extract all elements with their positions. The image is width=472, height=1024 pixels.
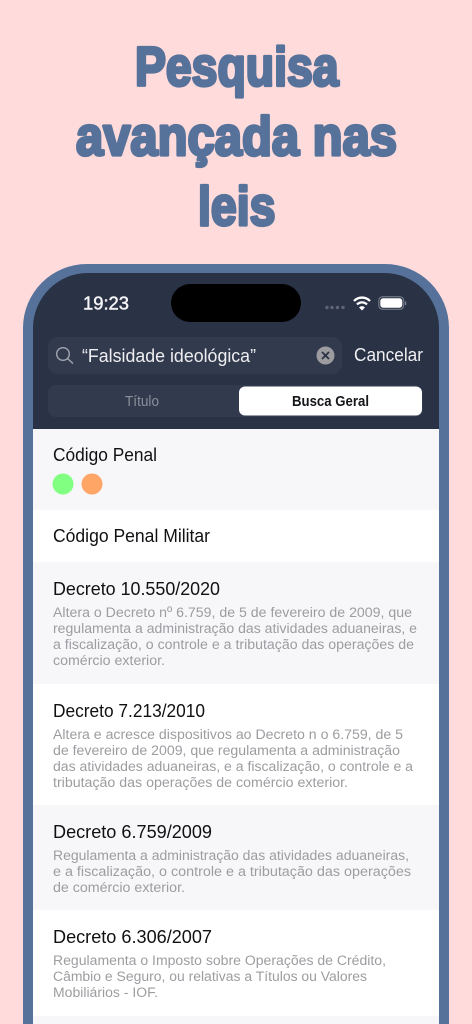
list row: Decreto 6.759/2009 — [33, 805, 439, 910]
title: leis — [198, 175, 276, 237]
list row: Decreto 6.759/2009: e a fiscalização, o controle e a tributação das operações — [53, 864, 411, 880]
list row: Decreto 6.306/2007: Regulamenta o Imposto sobre Operações de Crédito, — [53, 953, 386, 969]
list row: Decreto 10.550/2020: a fiscalização, o controle e a tributação das operações de — [53, 637, 414, 653]
search query: “Falsidade ideológica” — [82, 345, 256, 366]
list row: Decreto 6.306/2007: Decreto 6.306/2007 — [53, 926, 212, 947]
list row: Código Penal Militar — [33, 510, 439, 562]
list row: Decreto 10.550/2020 — [33, 562, 439, 684]
list row: Decreto 7.213/2010: de fevereiro de 2009, que regulamenta a administração — [53, 743, 400, 759]
list row: Decreto 10.550/2020: comércio exterior. — [53, 653, 165, 669]
list row: Decreto 10.550/2020: Decreto 10.550/2020 — [53, 578, 220, 599]
list row: Decreto 7.213/2010: Decreto 7.213/2010 — [53, 700, 205, 721]
search field — [48, 337, 342, 374]
list row: Decreto 7.213/2010 — [33, 684, 439, 805]
status dot: green — [52, 474, 74, 494]
list row: Decreto 6.306/2007 — [33, 910, 439, 1016]
panel: phone — [23, 264, 449, 1024]
icon: magnifier — [57, 348, 73, 364]
title: avançada nas — [76, 105, 397, 167]
list row: Decreto 6.759/2009: de comércio exterior. — [53, 880, 185, 896]
list row: Decreto 6.759/2009: Regulamenta a administração das atividades aduaneiras, — [53, 848, 409, 864]
list row: Decreto 10.550/2020: regulamenta a administração das atividades aduaneiras, e — [53, 621, 417, 637]
list row: Código Penal: Código Penal — [53, 444, 157, 465]
segmented control: Título — [125, 394, 159, 410]
icon: clear button — [316, 346, 334, 364]
segmented control: Busca Geral — [292, 394, 369, 410]
status time: 19:23 — [83, 294, 129, 314]
list row: Código Penal Militar: Código Penal Militar — [53, 525, 210, 546]
cancel button: Cancelar — [354, 344, 423, 365]
status dot: orange — [82, 474, 102, 494]
list row: Decreto 6.759/2009: Decreto 6.759/2009 — [53, 821, 212, 842]
phone frame — [23, 264, 449, 1024]
list row: Decreto 6.306/2007: Mobiliários - IOF. — [53, 985, 158, 1001]
dynamic island — [171, 284, 301, 322]
title: Pesquisa — [135, 36, 339, 98]
segmented control — [48, 385, 423, 417]
app header background — [33, 273, 439, 429]
icon: signal dots — [325, 306, 345, 309]
list row: Decreto 6.306/2007: Câmbio e Seguro, ou relativas a Títulos ou Valores — [53, 969, 367, 985]
icon: battery — [379, 297, 406, 309]
list row: Decreto 7.213/2010: Altera e acresce dispositivos ao Decreto n o 6.759, de 5 — [53, 727, 403, 743]
list row: next row, cut off — [33, 1016, 439, 1024]
list row: Código Penal — [33, 429, 439, 510]
list row: Decreto 7.213/2010: tributação das operações de comércio exterior. — [53, 775, 348, 791]
list row: Decreto 10.550/2020: Altera o Decreto nº 6.759, de 5 de fevereiro de 2009, que — [53, 605, 412, 621]
title — [76, 36, 397, 237]
icon: wifi — [354, 298, 370, 310]
list row: Decreto 7.213/2010: das atividades aduaneiras, e a fiscalização, o controle e a — [53, 759, 413, 775]
